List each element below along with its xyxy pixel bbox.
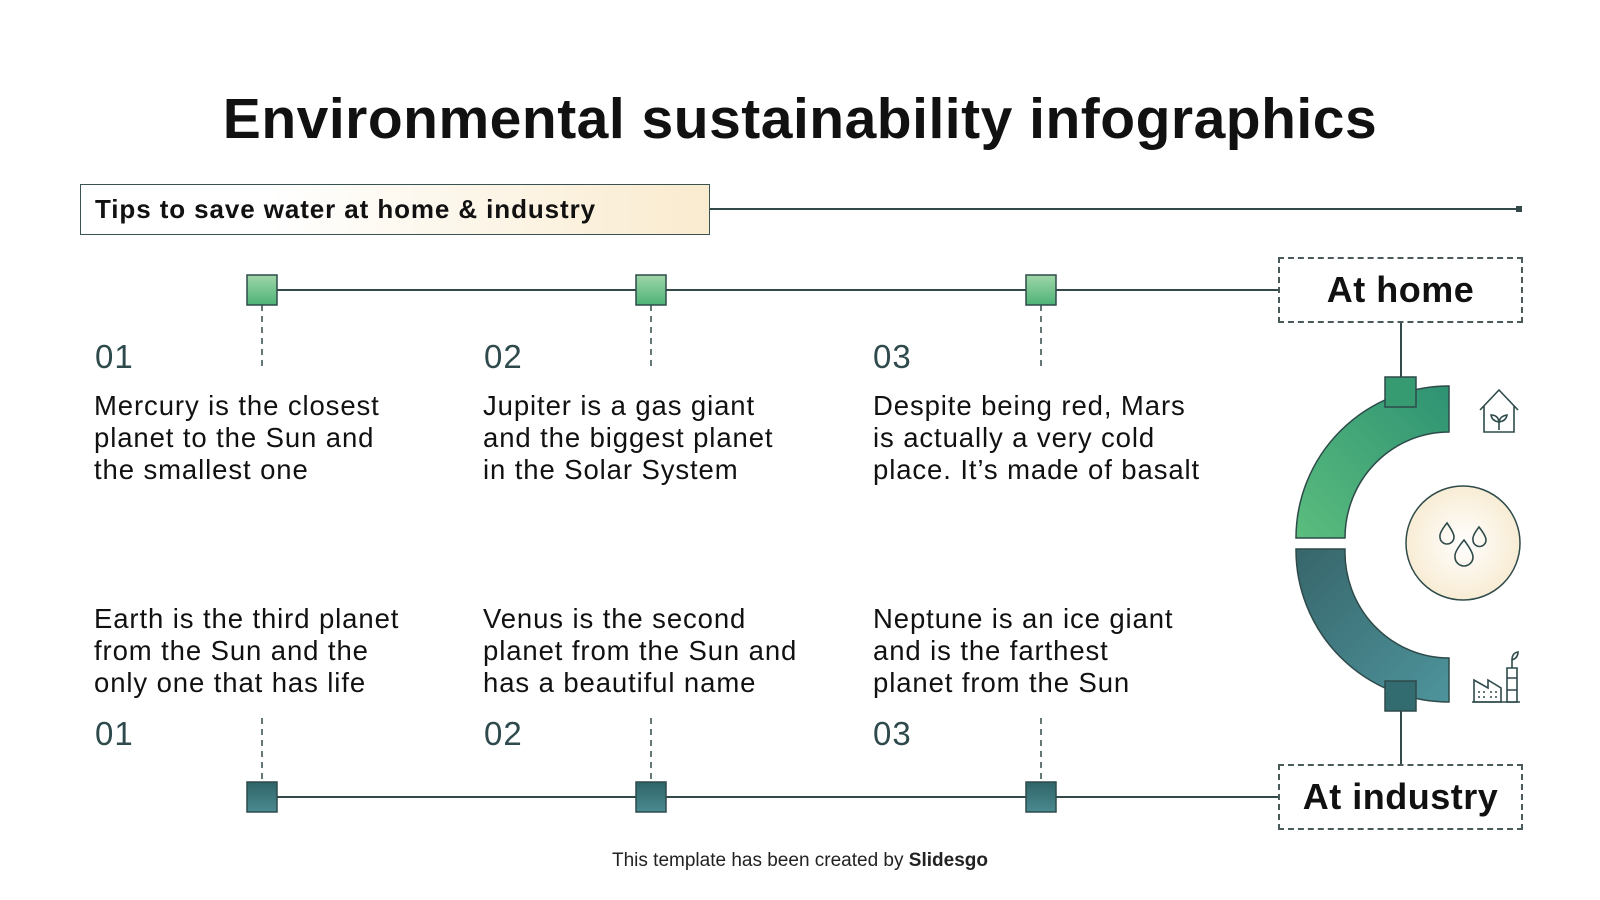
text 2 top: in the Solar System xyxy=(483,454,739,485)
subtitle box: Tips to save water at home & industry xyxy=(95,194,596,224)
text 3 top: Despite being red, Mars xyxy=(873,390,1186,421)
text 1 top: Mercury is the closest xyxy=(94,390,380,421)
text 2 bottom: has a beautiful name xyxy=(483,667,756,698)
number 03 top: 03 xyxy=(873,338,912,375)
text 2 top xyxy=(483,390,773,485)
text 3 top xyxy=(873,390,1200,485)
subtitle box xyxy=(80,184,710,235)
icon: house xyxy=(1480,390,1518,432)
text 1 bottom: Earth is the third planet xyxy=(94,603,399,634)
industry tips xyxy=(94,603,1173,752)
footer: This template has been created by Slidesgo xyxy=(612,850,988,871)
text 3 bottom: Neptune is an ice giant xyxy=(873,603,1173,634)
text 2 bottom: Venus is the second xyxy=(483,603,746,634)
text 1 top: planet to the Sun and xyxy=(94,422,374,453)
text 2 bottom: planet from the Sun and xyxy=(483,635,797,666)
text 3 bottom: and is the farthest xyxy=(873,635,1109,666)
text 1 bottom: only one that has life xyxy=(94,667,366,698)
text 1 top xyxy=(94,390,380,485)
text 1 bottom: from the Sun and the xyxy=(94,635,369,666)
text 3 bottom: planet from the Sun xyxy=(873,667,1130,698)
text 2 top: Jupiter is a gas giant xyxy=(483,390,755,421)
text 3 bottom xyxy=(873,603,1173,698)
arcs xyxy=(1296,386,1449,538)
number 01 top: 01 xyxy=(95,338,134,375)
number 03 bottom: 03 xyxy=(873,715,912,752)
icon: water drops xyxy=(1440,523,1486,566)
text 3 top: place. It’s made of basalt xyxy=(873,454,1200,485)
label: At home: At home xyxy=(1327,269,1474,310)
text 2 top: and the biggest planet xyxy=(483,422,773,453)
text 1 bottom xyxy=(94,603,399,698)
label: At home xyxy=(1278,257,1523,323)
home tips xyxy=(94,338,1200,485)
number 02 bottom: 02 xyxy=(484,715,523,752)
icon: factory xyxy=(1472,652,1520,702)
number 01 bottom: 01 xyxy=(95,715,134,752)
label: At industry: At industry xyxy=(1303,776,1498,817)
label: At industry xyxy=(1278,764,1523,830)
text 2 bottom xyxy=(483,603,797,698)
title: Environmental sustainability infographics xyxy=(223,87,1377,151)
text 1 top: the smallest one xyxy=(94,454,309,485)
number 02 top: 02 xyxy=(484,338,523,375)
text 3 top: is actually a very cold xyxy=(873,422,1155,453)
